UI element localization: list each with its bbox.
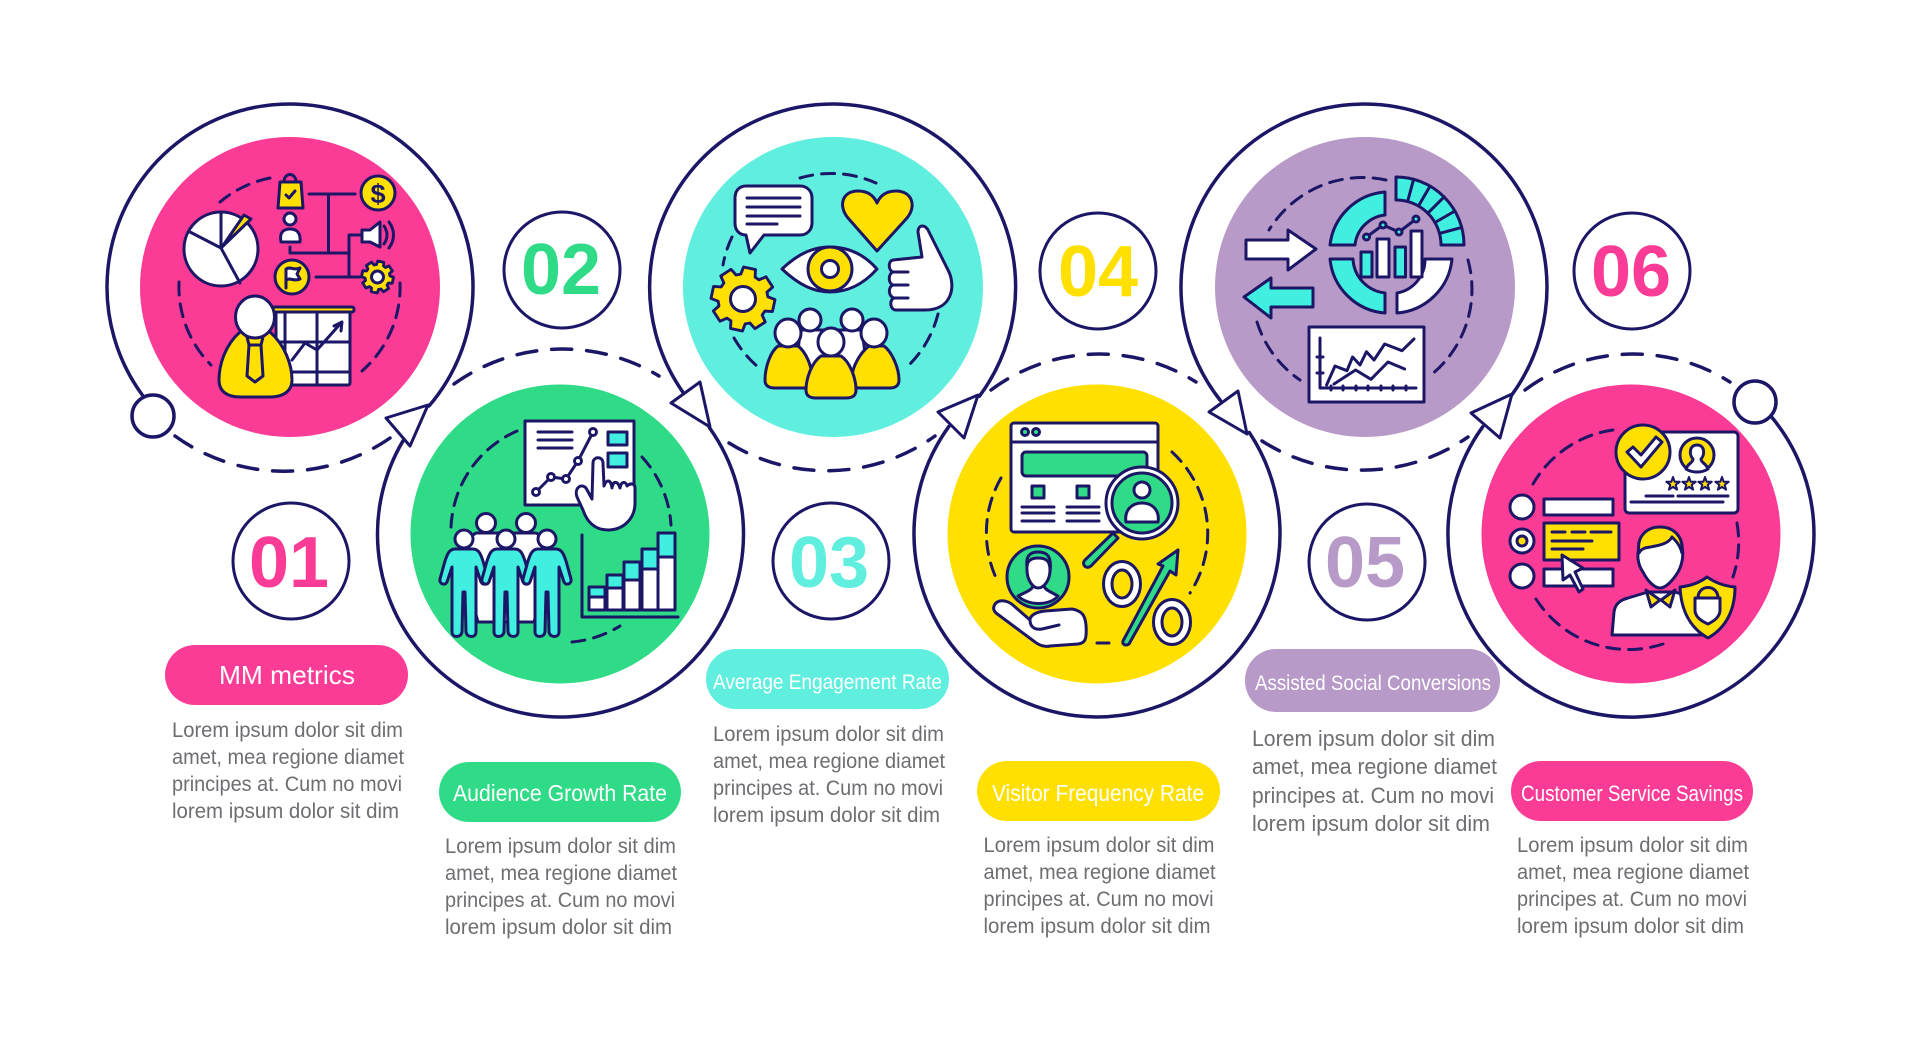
text block: step 2 description xyxy=(445,835,677,939)
label pill: MM metrics xyxy=(165,645,408,705)
step number 03 xyxy=(773,503,889,619)
label pill: Customer Service Savings xyxy=(1511,761,1753,821)
step number 04 xyxy=(1040,213,1156,329)
text block: step 6 description: Lorem ipsum dolor sit dim xyxy=(1517,834,1748,857)
timeline ring connectors xyxy=(107,104,1814,717)
label pill: Assisted Social Conversions xyxy=(1245,649,1500,712)
label pill: Audience Growth Rate xyxy=(439,762,681,822)
icon: flag coin xyxy=(275,260,309,294)
inner dashed circle xyxy=(179,178,400,371)
icon: dollar coin: $ xyxy=(370,179,386,209)
icon: customer service man xyxy=(1612,527,1710,635)
text block: step 3 description: amet, mea regione diamet xyxy=(713,750,945,773)
chart: line graph card xyxy=(1309,327,1424,402)
icon: pie chart xyxy=(184,212,258,286)
icon: browser window xyxy=(1011,423,1158,532)
icon: cyan arrow xyxy=(1244,278,1313,318)
icon: user portrait xyxy=(1007,546,1069,608)
icon: thumbs up xyxy=(889,226,952,310)
text block: step 4 description: amet, mea regione diamet xyxy=(984,861,1216,884)
text block: step 1 description: principes at. Cum no movi xyxy=(172,773,402,796)
step number 04: 04 xyxy=(1058,232,1138,312)
icon: whiteboard with rising chart xyxy=(272,307,354,385)
connector lines xyxy=(290,194,362,277)
text block: step 2 description: amet, mea regione diamet xyxy=(445,862,677,885)
text block: step 3 description xyxy=(713,723,945,827)
text block: step 2 description: principes at. Cum no movi xyxy=(445,889,675,912)
yellow disc xyxy=(948,384,1246,684)
arrow 5 to 6 xyxy=(1471,394,1512,438)
label pill: Visitor Frequency Rate: Visitor Frequency Rate xyxy=(992,780,1204,806)
text block: step 2 description: Lorem ipsum dolor sit dim xyxy=(445,835,676,858)
label pill: Customer Service Savings: Customer Service Savings xyxy=(1521,781,1743,806)
panel: step 6 icon disc xyxy=(1482,384,1780,684)
inner dashed circle xyxy=(986,452,1208,643)
icon: gear xyxy=(706,262,780,336)
end node xyxy=(1734,381,1776,423)
icon: pointing hand xyxy=(576,458,635,530)
ring 2 xyxy=(378,349,744,717)
panel: step 1 icon disc xyxy=(140,137,440,437)
icon: dollar coin xyxy=(361,176,395,210)
inner dashed circle xyxy=(451,431,671,642)
text block: step 5 description: lorem ipsum dolor sit dim xyxy=(1252,811,1490,836)
text block: step 6 description: principes at. Cum no movi xyxy=(1517,888,1747,911)
arrow 3 to 4 xyxy=(938,395,978,438)
pink disc xyxy=(140,137,440,437)
step number 06: 06 xyxy=(1591,232,1671,312)
icon: eye xyxy=(782,247,877,292)
text block: step 6 description xyxy=(1517,834,1749,938)
icon: gear xyxy=(359,258,396,296)
panel: step 3 icon disc xyxy=(683,137,983,437)
cyan disc xyxy=(683,137,983,437)
icon: team xyxy=(765,309,899,398)
chart: donut segments xyxy=(1330,177,1464,313)
panel: step 2 icon disc xyxy=(410,384,710,684)
step number 01: 01 xyxy=(249,523,329,603)
start node xyxy=(132,395,174,437)
text block: step 3 description: principes at. Cum no movi xyxy=(713,777,943,800)
icon: chart board xyxy=(525,421,634,505)
label pill: Visitor Frequency Rate xyxy=(977,761,1220,821)
icon: presenter xyxy=(219,296,292,397)
icon: open hand xyxy=(994,601,1086,646)
icon: security shield xyxy=(1680,577,1735,638)
step number 06 xyxy=(1574,213,1690,329)
text block: step 1 description: lorem ipsum dolor sit dim xyxy=(172,800,399,823)
step number 05: 05 xyxy=(1325,523,1405,603)
text block: step 1 description: amet, mea regione diamet xyxy=(172,746,404,769)
inner dashed circle xyxy=(1257,178,1472,380)
panel: step 5 icon disc xyxy=(1215,137,1515,437)
arrow 2 to 3 xyxy=(671,382,710,427)
ring 1 xyxy=(107,104,473,471)
inner dashed circle xyxy=(1533,430,1739,650)
icon: magnifier with user xyxy=(1084,467,1178,567)
pink disc xyxy=(1482,384,1780,684)
text block: step 1 description xyxy=(172,719,404,823)
label pill: Average Engagement Rate: Average Engagement Rate xyxy=(713,671,942,694)
purple disc xyxy=(1215,137,1515,437)
icon: white arrow xyxy=(1246,230,1316,270)
label pill: Assisted Social Conversions: Assisted Social Conversions xyxy=(1255,672,1491,695)
inner dashed circle xyxy=(723,173,938,367)
icon: front row people xyxy=(440,530,571,636)
text block: step 4 description xyxy=(984,834,1216,938)
text block: step 5 description: principes at. Cum no movi xyxy=(1252,783,1494,808)
ring 3 xyxy=(650,104,1016,471)
icon: cursor xyxy=(1562,555,1583,592)
text block: step 5 description: amet, mea regione diamet xyxy=(1252,754,1497,779)
chart: mini bars and trend xyxy=(1361,216,1422,277)
chart: rising bars xyxy=(582,533,678,617)
icon: shopping bag xyxy=(278,174,303,208)
green disc xyxy=(410,384,710,684)
icon: back row people xyxy=(464,514,550,622)
label pill: Average Engagement Rate xyxy=(706,649,949,709)
text block: step 1 description: Lorem ipsum dolor sit dim xyxy=(172,719,403,742)
icon: heart xyxy=(843,191,912,251)
label pill: MM metrics: MM metrics xyxy=(219,660,355,690)
text block: step 5 description xyxy=(1252,726,1497,836)
text block: step 3 description: Lorem ipsum dolor sit dim xyxy=(713,723,944,746)
icon: small person xyxy=(281,213,300,242)
step number 03: 03 xyxy=(789,523,869,603)
icon: speaker xyxy=(362,222,394,248)
panel: step 4 icon disc xyxy=(948,384,1246,684)
step number 05 xyxy=(1309,504,1425,620)
arrow 1 to 2 xyxy=(386,405,428,446)
label pill: Audience Growth Rate: Audience Growth Rate xyxy=(453,780,667,806)
text block: step 6 description: amet, mea regione diamet xyxy=(1517,861,1749,884)
ring 6 xyxy=(1448,354,1814,717)
icon: review card xyxy=(1616,425,1738,513)
icon: form options xyxy=(1510,495,1619,588)
text block: step 3 description: lorem ipsum dolor sit dim xyxy=(713,804,940,827)
text block: step 6 description: lorem ipsum dolor sit dim xyxy=(1517,915,1744,938)
arrow 4 to 5 xyxy=(1209,391,1247,434)
step number 01 xyxy=(233,503,349,619)
text block: step 2 description: lorem ipsum dolor sit dim xyxy=(445,916,672,939)
ring 4 xyxy=(914,354,1280,717)
ring 5 xyxy=(1181,104,1547,470)
icon: percent sign arrow xyxy=(1104,550,1190,645)
text block: step 4 description: Lorem ipsum dolor sit dim xyxy=(984,834,1214,857)
step number 02: 02 xyxy=(521,230,601,310)
text block: step 4 description: lorem ipsum dolor sit dim xyxy=(984,915,1210,938)
text block: step 4 description: principes at. Cum no movi xyxy=(984,888,1214,911)
icon: speech bubble xyxy=(735,186,812,253)
text block: step 5 description: Lorem ipsum dolor sit dim xyxy=(1252,726,1495,751)
step number 02 xyxy=(504,212,620,328)
